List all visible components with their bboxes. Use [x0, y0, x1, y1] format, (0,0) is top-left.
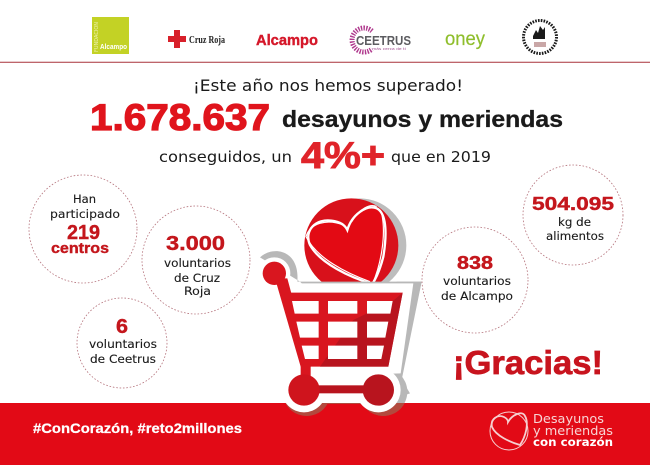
- logo: Fundación Alcampo: FUNDACION: [94, 22, 100, 52]
- logo: Alcampo: Alcampo: [256, 32, 318, 49]
- thanks message: ¡Gracias!: [453, 344, 603, 381]
- bubble: 6 voluntarios de Ceetrus: voluntarios: [89, 337, 157, 351]
- bubble: 504.095 kg de alimentos: alimentos: [546, 229, 604, 243]
- logo text: Desayunos: [533, 411, 604, 426]
- cart basket: [284, 293, 403, 367]
- bubble: 504.095 kg de alimentos: 504.095: [532, 194, 614, 214]
- logo: Ceetrus: CEETRUS: [356, 33, 411, 48]
- logo: Fundación Alcampo: Alcampo: [100, 44, 127, 51]
- bubble: 838 voluntarios de Alcampo: voluntarios: [443, 274, 511, 288]
- cart white outline: [258, 257, 413, 412]
- bubble: 219 centros: participado: [50, 207, 120, 221]
- bubble: 504.095 kg de alimentos: kg de: [558, 215, 591, 229]
- bubble: 6 voluntarios de Ceetrus: 6: [116, 316, 128, 338]
- wheel shadows on band: [286, 403, 404, 416]
- logo: Cruz Roja: Cruz Roja: [189, 34, 225, 46]
- logo: oney: oney: [445, 29, 485, 50]
- logo: Ceetrus: más cerca de ti: [372, 47, 406, 51]
- bubble: 219 centros: centros: [51, 240, 109, 257]
- ball shadow: [312, 198, 406, 292]
- wheel axle: [310, 385, 370, 393]
- subline end: que en 2019: [391, 148, 491, 166]
- logo: Ceetrus: [352, 28, 411, 52]
- bubble: 838 voluntarios de Alcampo: 838: [457, 253, 493, 273]
- bubble: 838 voluntarios de Alcampo: de Alcampo: [441, 289, 513, 303]
- headline block: [90, 76, 563, 176]
- subline start: conseguidos, un: [159, 148, 292, 166]
- bubble: 219 centros: 219: [67, 222, 100, 244]
- bubble: 219 centros: [29, 175, 137, 283]
- bubble: 3.000 voluntarios de Cruz Roja: [142, 206, 250, 314]
- ball: [304, 198, 398, 292]
- bubble: 3.000 voluntarios de Cruz Roja: de Cruz: [174, 271, 220, 285]
- campaign logo: y meriendas: [533, 423, 613, 438]
- campaign logo: [490, 411, 613, 450]
- bubble: 838 voluntarios de Alcampo: [422, 227, 528, 333]
- big number label: desayunos y meriendas: [282, 106, 563, 132]
- heart: [306, 206, 386, 284]
- bottom red band: [0, 403, 650, 465]
- campaign logo: con corazón: [533, 435, 613, 449]
- left wheel: [288, 374, 320, 406]
- cart shadow: [260, 251, 422, 416]
- bubble: 6 voluntarios de Ceetrus: [77, 298, 167, 388]
- logo row: [92, 17, 556, 54]
- big number: 1.678.637: [90, 97, 270, 138]
- right wheel: [363, 374, 394, 406]
- bubble: 504.095 kg de alimentos: [523, 165, 623, 265]
- bubble: 6 voluntarios de Ceetrus: de Ceetrus: [90, 352, 156, 366]
- logo: Cruz Roja: [168, 30, 225, 48]
- logo heart in circle: [490, 412, 528, 450]
- bubble: 3.000 voluntarios de Cruz Roja: 3.000: [166, 233, 225, 255]
- percentage: 4%+: [301, 135, 385, 176]
- cart leg: [301, 365, 311, 382]
- hashtags: #ConCorazón, #reto2millones: [33, 420, 242, 436]
- illustration: shopping cart with heart ball: [258, 198, 422, 416]
- intro line: ¡Este año nos hemos superado!: [193, 76, 463, 95]
- logo: round seal: [524, 20, 556, 54]
- bubble: 219 centros: Han: [73, 192, 96, 206]
- bubble: 3.000 voluntarios de Cruz Roja: voluntarios: [164, 256, 231, 270]
- handle: [275, 278, 311, 367]
- logo: Fundación Alcampo: [92, 17, 129, 54]
- bubble: 3.000 voluntarios de Cruz Roja: Roja: [184, 284, 211, 298]
